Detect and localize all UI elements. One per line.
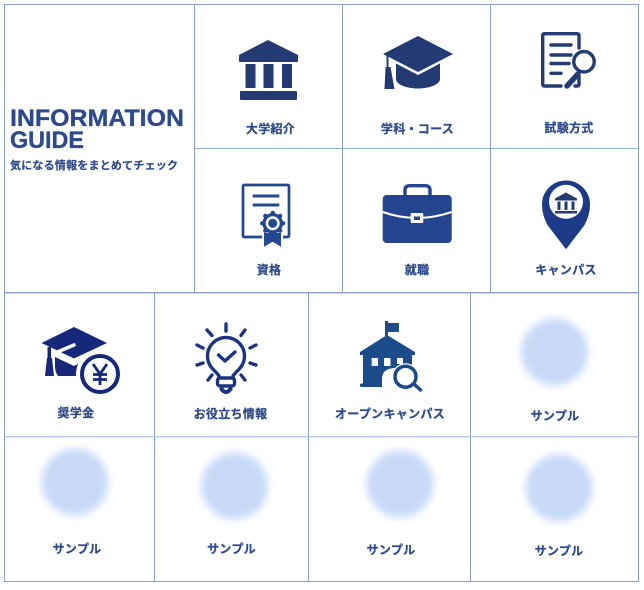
panel: qualifications xyxy=(243,185,289,277)
icon: blurred placeholder circle xyxy=(521,318,588,386)
icon: lightbulb with check xyxy=(197,324,256,392)
icon: blurred placeholder circle xyxy=(201,452,268,520)
icon: blurred placeholder circle xyxy=(526,454,592,522)
panel: sample 2 xyxy=(42,448,108,556)
panel: sample 5 xyxy=(526,454,592,558)
label: 奨学金 xyxy=(58,405,94,420)
label: 就職 xyxy=(405,262,429,277)
panel: employment xyxy=(383,186,452,277)
label: サンプル xyxy=(535,544,583,558)
panel: departments and courses xyxy=(381,36,454,136)
panel: exam method xyxy=(543,34,594,135)
icon: briefcase xyxy=(383,186,452,243)
panel: open campus xyxy=(335,321,445,421)
panel: useful information xyxy=(194,324,267,421)
panel: scholarship xyxy=(42,327,124,420)
icon: certificate xyxy=(243,185,289,247)
label: サンプル xyxy=(367,543,415,557)
icon: graduation cap with yen coin xyxy=(42,327,124,398)
icon: university building xyxy=(239,40,298,100)
icon: map pin with building xyxy=(542,181,590,248)
panel: sample 1 xyxy=(521,318,588,423)
subtitle: 気になる情報をまとめてチェック xyxy=(10,158,178,172)
title xyxy=(10,105,184,154)
label: サンプル xyxy=(207,542,256,556)
icon: blurred placeholder circle xyxy=(42,448,108,516)
label: サンプル xyxy=(53,542,101,556)
label: キャンパス xyxy=(535,263,597,277)
panel: sample 3 xyxy=(201,452,268,556)
icon: school building with magnifier xyxy=(360,321,420,390)
label: 学科・コース xyxy=(381,121,454,136)
label: 資格 xyxy=(257,262,281,277)
label: お役立ち情報 xyxy=(194,406,267,421)
panel: sample 4 xyxy=(366,450,434,557)
title: INFORMATION xyxy=(10,105,184,132)
label: サンプル xyxy=(531,409,579,423)
icon: graduation cap xyxy=(383,36,453,89)
label: 試験方式 xyxy=(544,120,594,135)
panel: campus xyxy=(535,181,597,277)
panel: university introduction xyxy=(239,40,298,136)
label: 大学紹介 xyxy=(246,121,295,136)
icon: blurred placeholder circle xyxy=(366,450,434,518)
icon: document and magnifier xyxy=(543,34,594,86)
title: GUIDE xyxy=(10,127,84,154)
label: オープンキャンパス xyxy=(335,407,445,421)
